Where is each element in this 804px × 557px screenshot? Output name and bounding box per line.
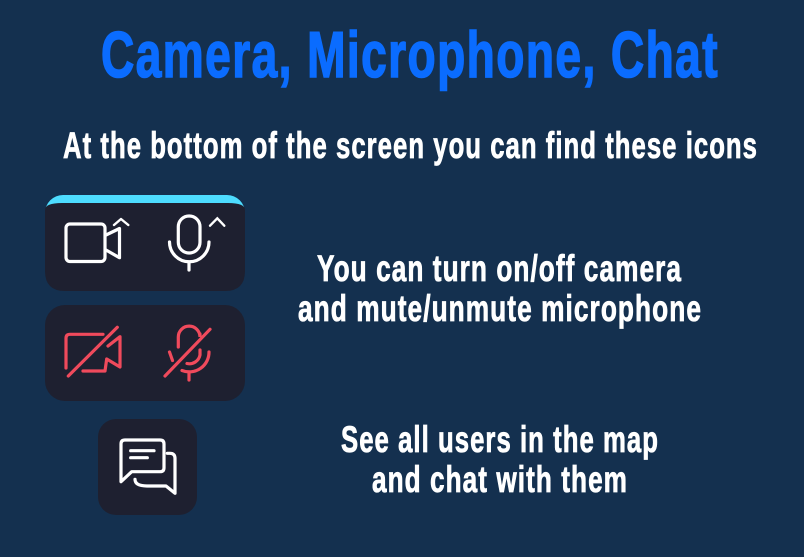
text: chat description: See all users in the map <box>341 419 659 460</box>
icon: chat bubbles <box>121 440 175 493</box>
panel: camera and microphone off <box>45 305 245 401</box>
icon: camera <box>66 219 128 262</box>
text: chat description: and chat with them <box>372 459 628 500</box>
text: camera and microphone description <box>298 248 702 329</box>
panel body <box>45 305 245 401</box>
icon: microphone off <box>165 326 210 380</box>
panel: chat <box>98 419 197 515</box>
icon: camera off <box>66 327 120 376</box>
panel: camera and microphone on <box>45 195 245 291</box>
icon: microphone <box>170 216 224 270</box>
text: chat description <box>341 419 659 500</box>
panel body <box>45 203 245 291</box>
panel top highlight <box>45 195 245 245</box>
panel body <box>98 419 197 515</box>
